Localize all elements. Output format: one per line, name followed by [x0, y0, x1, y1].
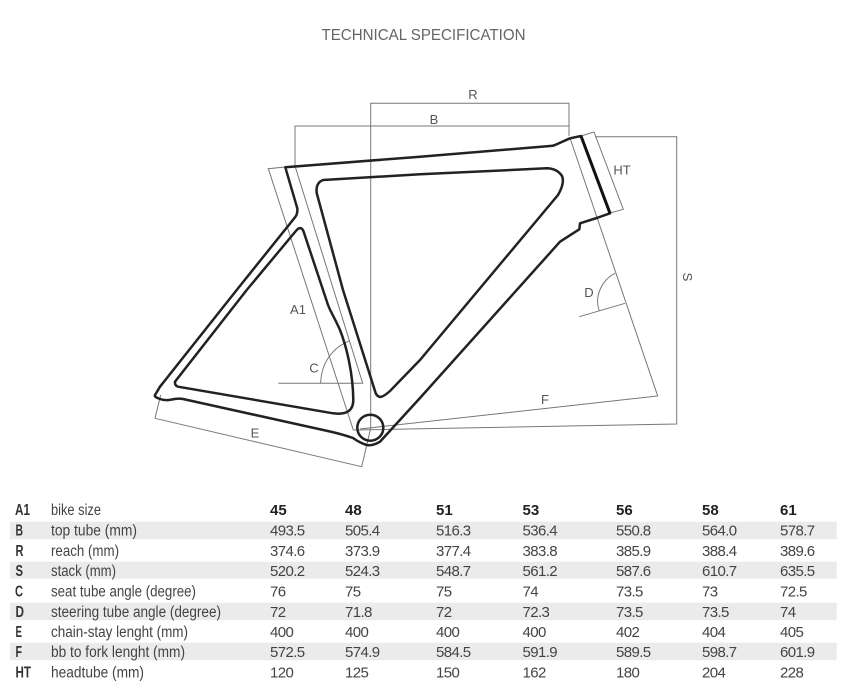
label D: D [584, 285, 594, 300]
dimension lines seat tube, A1 and angle C [268, 166, 363, 430]
row: bb to fork length: 574.9 [345, 644, 380, 661]
label HT: HT [613, 162, 631, 178]
row: reach: reach (mm) [51, 543, 119, 560]
head tube thick line [581, 136, 610, 213]
row: steering tube angle: D [16, 604, 24, 621]
row: seat tube angle: 73 [702, 584, 718, 600]
row: bike size: 45 [270, 502, 287, 519]
row: steering tube angle: 73.5 [616, 604, 643, 621]
row: headtube: 125 [345, 665, 368, 682]
row: chain-stay length: 402 [616, 624, 639, 641]
row: headtube: 228 [780, 665, 803, 682]
row: seat tube angle: 73.5 [616, 584, 643, 600]
row: stack: 610.7 [702, 563, 737, 580]
row: headtube: HT [16, 665, 31, 682]
row: headtube: 150 [436, 665, 459, 682]
row: stack: 548.7 [436, 563, 471, 580]
bottom bracket circle [357, 415, 383, 441]
row: stack: 561.2 [522, 563, 557, 580]
title: TECHNICAL SPECIFICATION [322, 27, 526, 44]
row: top tube: 493.5 [270, 522, 305, 540]
row: seat tube angle: 75 [345, 584, 361, 600]
row: reach: 385.9 [616, 543, 651, 560]
row: chain-stay length: 405 [780, 624, 803, 641]
row: headtube: headtube (mm) [51, 665, 144, 682]
row: reach: 373.9 [345, 543, 380, 560]
row: top tube: top tube (mm) [51, 522, 137, 540]
row: chain-stay length: 400 [270, 624, 293, 641]
row: steering tube angle: steering tube angle (degree) [51, 604, 221, 621]
row: top tube [16, 522, 815, 540]
dimension lines chain-stay E [155, 395, 371, 467]
row: bb to fork length: 584.5 [436, 644, 471, 661]
row: bike size: 51 [436, 502, 453, 519]
row: bb to fork length: 601.9 [780, 644, 815, 661]
row: reach: 383.8 [522, 543, 557, 560]
row: chain-stay length: E [16, 624, 22, 641]
row: reach: 377.4 [436, 543, 471, 560]
row: top tube: 578.7 [780, 522, 815, 540]
row: top tube: 550.8 [616, 522, 651, 540]
row: stack: 520.2 [270, 563, 305, 580]
row: seat tube angle [15, 584, 807, 600]
label R: R [468, 87, 478, 102]
bike frame rear triangle inner outline [175, 228, 353, 414]
row: bb to fork length: 598.7 [702, 644, 737, 661]
row: steering tube angle [16, 604, 796, 621]
row: stack: 587.6 [616, 563, 651, 580]
alternating row bands [10, 522, 837, 660]
row: top tube: 505.4 [345, 522, 380, 540]
row: top tube: B [16, 522, 23, 540]
row: steering tube angle: 72 [436, 604, 452, 621]
label S: S [680, 273, 695, 282]
label B: B [430, 112, 438, 127]
row: steering tube angle: 71.8 [345, 604, 372, 621]
row: top tube: 564.0 [702, 522, 737, 540]
row: reach: 374.6 [270, 543, 305, 560]
specification table [10, 502, 837, 682]
row: chain-stay length [16, 624, 803, 641]
row: seat tube angle: 74 [522, 584, 538, 600]
label C: C [309, 360, 319, 376]
row: bb to fork length: 572.5 [270, 644, 305, 661]
row: steering tube angle: 72 [270, 604, 286, 621]
row: seat tube angle: C [15, 584, 23, 600]
row: bb to fork length: 589.5 [616, 644, 651, 661]
row: stack: 524.3 [345, 563, 380, 580]
row: seat tube angle: 76 [270, 584, 286, 600]
row: seat tube angle: 75 [436, 584, 452, 600]
row: reach: 389.6 [780, 543, 815, 560]
label E: E [251, 426, 260, 440]
label A1: A1 [290, 302, 306, 317]
row: stack: S [16, 563, 23, 580]
row: bike size [15, 502, 797, 519]
row: top tube: 516.3 [436, 522, 471, 540]
frame geometry diagram [155, 87, 695, 467]
row: bb to fork length: 591.9 [522, 644, 557, 661]
row: chain-stay length: 400 [522, 624, 546, 641]
dimension lines R and B [295, 103, 569, 428]
row: steering tube angle: 72.3 [522, 604, 550, 621]
row: headtube [16, 665, 803, 682]
row: bb to fork length [16, 644, 815, 661]
row: stack: 635.5 [780, 563, 815, 580]
label F: F [541, 392, 549, 407]
row: headtube: 180 [616, 665, 639, 682]
row: reach: R [16, 543, 24, 560]
row: stack [16, 563, 815, 580]
row: headtube: 120 [270, 665, 293, 682]
bike frame outer outline [155, 136, 610, 445]
row: chain-stay length: 400 [345, 624, 368, 641]
row: chain-stay length: 404 [702, 624, 725, 641]
row: seat tube angle: 72.5 [780, 584, 807, 600]
row: top tube: 536.4 [522, 522, 557, 540]
row: steering tube angle: 73.5 [702, 604, 729, 621]
row: bike size: 61 [780, 502, 797, 519]
row: reach [16, 543, 815, 560]
row: chain-stay length: chain-stay lenght (mm) [51, 624, 188, 641]
row: headtube: 204 [702, 665, 725, 682]
dimension lines stack S, F, head tube and angle D [353, 132, 677, 430]
row: headtube: 162 [522, 665, 546, 682]
row: bike size: bike size [51, 502, 101, 519]
row: seat tube angle: seat tube angle (degree) [51, 584, 196, 600]
row: stack: stack (mm) [51, 563, 116, 580]
row: chain-stay length: 400 [436, 624, 459, 641]
row: bike size: 48 [345, 502, 362, 519]
bike frame main triangle inner outline [317, 168, 563, 397]
row: bb to fork length: bb to fork lenght (mm) [51, 644, 185, 661]
row: reach: 388.4 [702, 543, 737, 560]
row: bike size: 53 [522, 502, 539, 519]
row: bike size: A1 [15, 502, 30, 519]
row: bb to fork length: F [16, 644, 22, 661]
row: bike size: 56 [616, 502, 633, 519]
row: steering tube angle: 74 [780, 604, 796, 621]
row: bike size: 58 [702, 502, 719, 519]
